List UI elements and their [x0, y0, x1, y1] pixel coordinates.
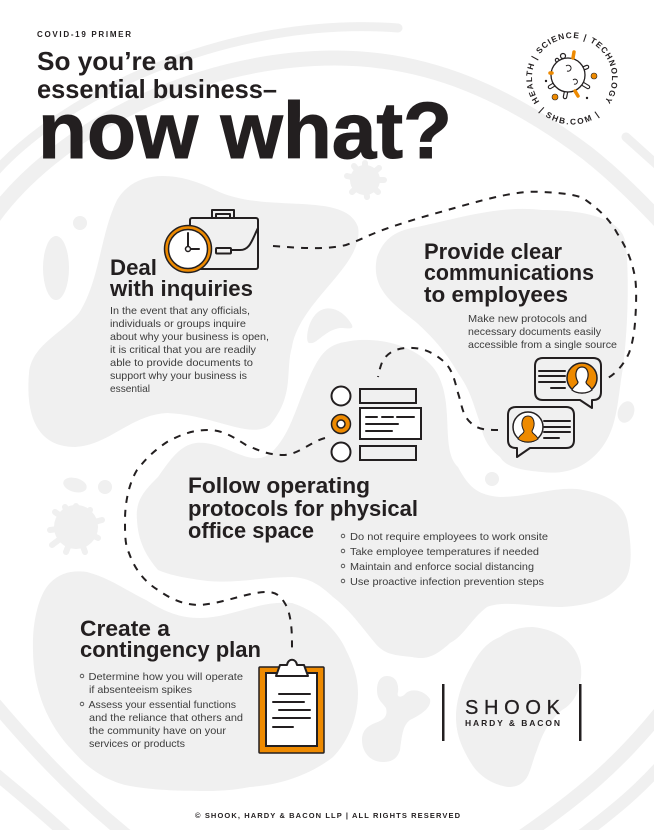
dashed connector: checklist to clipboard	[125, 430, 325, 648]
section: deal with inquiries: individuals or groups inquire	[110, 318, 246, 330]
section: create a contingency plan: Create a	[80, 616, 171, 641]
section: deal with inquiries: support why your business is	[110, 370, 247, 382]
icon: virus	[545, 52, 597, 100]
logo: Shook Hardy and Bacon	[442, 684, 582, 741]
background virus left	[50, 506, 102, 552]
section: deal with inquiries: able to provide documents to	[110, 357, 253, 369]
section: provide clear communications: Make new protocols and	[468, 313, 587, 325]
section: follow operating protocols: Take employee temperatures if needed	[350, 546, 539, 558]
section: create a contingency plan: and the reliance that others and	[89, 712, 243, 724]
seal: health science technology: HEALTH | SCIENCE | TECHNOLOGY	[526, 32, 618, 104]
title: So you’re an	[37, 46, 194, 76]
dashed connector: chat to checklist	[378, 348, 498, 430]
section: provide clear communications	[424, 239, 617, 351]
section: provide clear communications: Provide clear	[424, 239, 562, 264]
eyebrow: COVID-19 PRIMER: COVID-19 PRIMER	[37, 30, 131, 39]
logo: Shook Hardy and Bacon: SHOOK	[465, 697, 561, 719]
icon: clipboard	[259, 660, 324, 753]
icon: chat bubble white avatar	[508, 407, 574, 457]
section: create a contingency plan: services or products	[89, 738, 185, 750]
section: provide clear communications: communications	[424, 260, 594, 285]
section: follow operating protocols: Use proactive infection prevention steps	[350, 576, 544, 588]
footer: © SHOOK, HARDY & BACON LLP | ALL RIGHTS RESERVED	[195, 811, 461, 820]
icon: chat bubble orange avatar	[535, 358, 601, 408]
logo: Shook Hardy and Bacon: HARDY & BACON	[465, 718, 560, 728]
section: deal with inquiries: In the event that any officials,	[110, 305, 250, 317]
dashed connector: clock to communications	[273, 192, 636, 378]
section: deal with inquiries: it is critical that you are readily	[110, 344, 257, 356]
section: deal with inquiries: essential	[110, 383, 150, 395]
section: deal with inquiries	[109, 255, 269, 395]
section: provide clear communications: necessary documents easily	[468, 326, 602, 338]
section: create a contingency plan: the community have on your	[89, 725, 227, 737]
section: follow operating protocols: Maintain and enforce social distancing	[350, 561, 534, 573]
section: deal with inquiries: Deal	[110, 255, 157, 280]
section: follow operating protocols: Do not require employees to work onsite	[350, 531, 548, 543]
section: follow operating protocols: Follow operating	[188, 473, 370, 498]
section: deal with inquiries: with inquiries	[109, 276, 253, 301]
title: now what?	[38, 86, 452, 175]
section: create a contingency plan	[80, 616, 261, 750]
section: follow operating protocols	[188, 473, 548, 588]
seal: health science technology: | SHB.COM |	[538, 107, 600, 125]
section: follow operating protocols: office space	[188, 518, 314, 543]
section: create a contingency plan: Assess your essential functions	[88, 699, 236, 711]
section: deal with inquiries: about why your business is open,	[110, 331, 269, 343]
section: provide clear communications: to employees	[424, 282, 568, 307]
section: create a contingency plan: Determine how you will operate	[88, 671, 243, 683]
title	[37, 46, 452, 175]
icon: briefcase and clock	[164, 210, 258, 272]
section: follow operating protocols: protocols for physical	[188, 496, 418, 521]
section: provide clear communications: accessible from a single source	[468, 339, 617, 351]
background blobs	[28, 176, 637, 791]
background virus top	[347, 163, 384, 197]
title: essential business–	[37, 74, 277, 104]
section: create a contingency plan: contingency plan	[80, 637, 261, 662]
section: create a contingency plan: if absenteeism spikes	[89, 684, 192, 696]
icon: checklist	[332, 386, 421, 462]
